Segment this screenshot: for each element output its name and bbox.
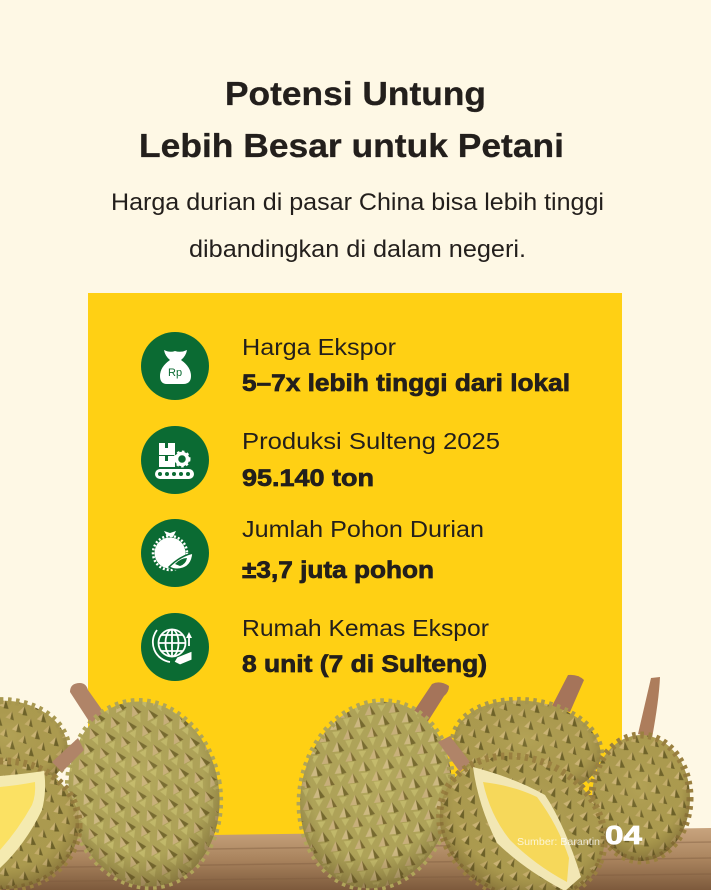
item: harga ekspor: Harga Ekspor [242,334,396,360]
item: harga ekspor [141,332,570,400]
item: jumlah pohon: ±3,7 juta pohon [242,557,434,584]
durian: far right [592,735,690,861]
page number: 04 [605,820,643,850]
stem [408,682,449,726]
item: produksi sulteng: 95.140 ton [242,465,374,492]
durian: open left [0,761,79,889]
wooden table [0,828,711,890]
stem [438,736,470,772]
subtitle [111,189,604,263]
title: Lebih Besar untuk Petani [139,127,564,164]
item: produksi sulteng: Produksi Sulteng 2025 [242,428,500,454]
durian: whole left [54,689,234,890]
stem [638,677,660,738]
durian: open center [416,730,628,890]
icon: globe and box [141,613,209,681]
source note: Sumber: Barantin [517,837,600,848]
photo: durians right group [283,675,690,890]
icon: conveyor with boxes [141,426,209,494]
item: rumah kemas [141,613,489,681]
item: jumlah pohon [141,516,484,587]
subtitle: dibandingkan di dalam negeri. [189,236,526,263]
stem [70,683,112,732]
stem [52,738,84,772]
icon: money bag: Rp [168,367,182,379]
panel: yellow facts background [88,293,622,838]
item: jumlah pohon: Jumlah Pohon Durian [242,516,484,542]
durian: whole center [283,687,469,890]
durian: back right [447,691,607,805]
item: rumah kemas: 8 unit (7 di Sulteng) [242,651,487,678]
photo: durians left group [0,683,234,890]
item: harga ekspor: 5–7x lebih tinggi dari lokal [242,370,570,397]
stem [551,675,584,712]
durian: back left [0,693,74,797]
icon: money bag [141,332,209,400]
item: produksi sulteng [141,426,500,494]
icon: durian fruit [141,519,209,587]
item: rumah kemas: Rumah Kemas Ekspor [242,615,489,641]
title: Potensi Untung [225,75,486,112]
subtitle: Harga durian di pasar China bisa lebih tinggi [111,189,604,216]
title [139,75,564,164]
